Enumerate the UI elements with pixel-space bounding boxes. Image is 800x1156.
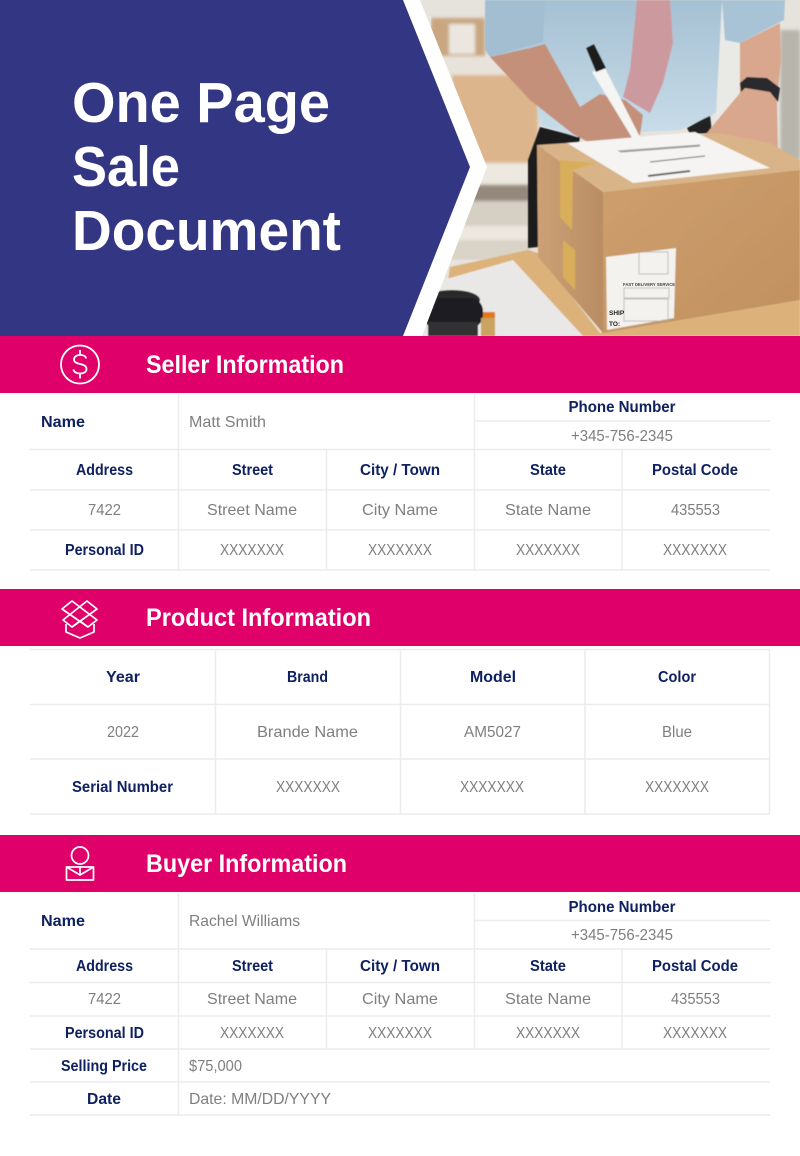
icon: dollar coin (61, 346, 99, 384)
product table grid (30, 650, 770, 814)
product values row: Brande Name (257, 724, 358, 741)
product serial number row (72, 779, 709, 796)
seller address header row: Postal Code (652, 462, 738, 479)
seller personal id row: XXXXXXX (368, 542, 432, 559)
buyer personal id row (65, 1025, 727, 1042)
seller personal id row: Personal ID (65, 542, 144, 559)
product serial number row: XXXXXXX (645, 779, 709, 796)
buyer date row (87, 1091, 331, 1108)
seller personal id row: XXXXXXX (516, 542, 580, 559)
seller heading band: Seller Information (146, 351, 344, 379)
seller personal id row: XXXXXXX (220, 542, 284, 559)
buyer personal id row: XXXXXXX (220, 1025, 284, 1042)
seller name row: Matt Smith (189, 414, 266, 431)
header photo: person labelling a cardboard box (400, 0, 800, 336)
header photo: person labelling a cardboard box: FAST DELIVERY SERVICE (623, 282, 675, 287)
icon: person with collar (66, 847, 94, 880)
product serial number row: XXXXXXX (460, 779, 524, 796)
buyer selling price row (61, 1058, 242, 1075)
buyer name row (41, 899, 676, 944)
buyer date row: Date: MM/DD/YYYY (189, 1091, 331, 1108)
seller address values row: 435553 (671, 502, 720, 519)
product heading band: Product Information (146, 604, 371, 632)
title: Document (72, 199, 341, 263)
seller address header row: State (530, 462, 566, 479)
buyer address values row: State Name (505, 991, 591, 1008)
buyer heading band (0, 835, 800, 892)
seller name row (41, 399, 676, 445)
buyer address values row: Street Name (207, 991, 297, 1008)
product serial number row: XXXXXXX (276, 779, 340, 796)
seller heading band (0, 336, 800, 393)
buyer address values row: 7422 (88, 991, 121, 1008)
buyer address header row: Address (76, 958, 133, 975)
product heading band (0, 589, 800, 646)
header photo: person labelling a cardboard box: SHIP (609, 310, 625, 317)
buyer address values row (88, 991, 720, 1008)
product serial number row: Serial Number (72, 779, 173, 796)
panel: product information (0, 589, 800, 814)
header chevron: white border (403, 0, 487, 336)
product header row (106, 669, 696, 686)
buyer name row: Phone Number (568, 899, 676, 916)
product values row (107, 724, 692, 741)
panel: buyer information (0, 835, 800, 1115)
seller address values row: State Name (505, 502, 591, 519)
product values row: AM5027 (464, 724, 521, 741)
seller address header row (76, 462, 738, 479)
buyer table grid (30, 893, 770, 1115)
title (72, 71, 341, 263)
buyer address header row (76, 958, 738, 975)
icon: open box (62, 601, 97, 638)
seller address values row: 7422 (88, 502, 121, 519)
buyer personal id row: XXXXXXX (663, 1025, 727, 1042)
seller name row: Phone Number (568, 399, 676, 416)
buyer personal id row: XXXXXXX (516, 1025, 580, 1042)
buyer personal id row: XXXXXXX (368, 1025, 432, 1042)
panel: seller information (0, 336, 800, 570)
buyer address values row: 435553 (671, 991, 720, 1008)
product header row: Year (106, 669, 140, 686)
product values row: 2022 (107, 724, 139, 741)
buyer selling price row: Selling Price (61, 1058, 147, 1075)
product header row: Color (658, 669, 696, 686)
seller address values row: City Name (362, 502, 438, 519)
seller name row: +345-756-2345 (571, 428, 673, 445)
buyer address header row: Street (232, 958, 273, 975)
product header row: Model (470, 669, 516, 686)
buyer heading band: Buyer Information (146, 850, 347, 878)
title: One Page (72, 71, 330, 135)
seller address header row: City / Town (360, 462, 440, 479)
buyer name row: +345-756-2345 (571, 927, 673, 944)
seller address header row: Street (232, 462, 273, 479)
title: Sale (72, 135, 180, 199)
buyer name row: Name (41, 913, 85, 930)
buyer date row: Date (87, 1091, 121, 1108)
buyer name row: Rachel Williams (189, 913, 300, 930)
header panel: navy arrow with title (0, 0, 470, 336)
seller personal id row (65, 542, 727, 559)
seller personal id row: XXXXXXX (663, 542, 727, 559)
buyer address header row: City / Town (360, 958, 440, 975)
seller address values row (88, 502, 720, 519)
product values row: Blue (662, 724, 692, 741)
buyer personal id row: Personal ID (65, 1025, 144, 1042)
seller address values row: Street Name (207, 502, 297, 519)
seller name row: Name (41, 414, 85, 431)
product header row: Brand (287, 669, 328, 686)
header photo: person labelling a cardboard box: TO: (609, 321, 620, 328)
buyer address values row: City Name (362, 991, 438, 1008)
buyer address header row: State (530, 958, 566, 975)
seller table grid (30, 394, 770, 570)
seller address header row: Address (76, 462, 133, 479)
buyer selling price row: $75,000 (189, 1058, 242, 1075)
buyer address header row: Postal Code (652, 958, 738, 975)
